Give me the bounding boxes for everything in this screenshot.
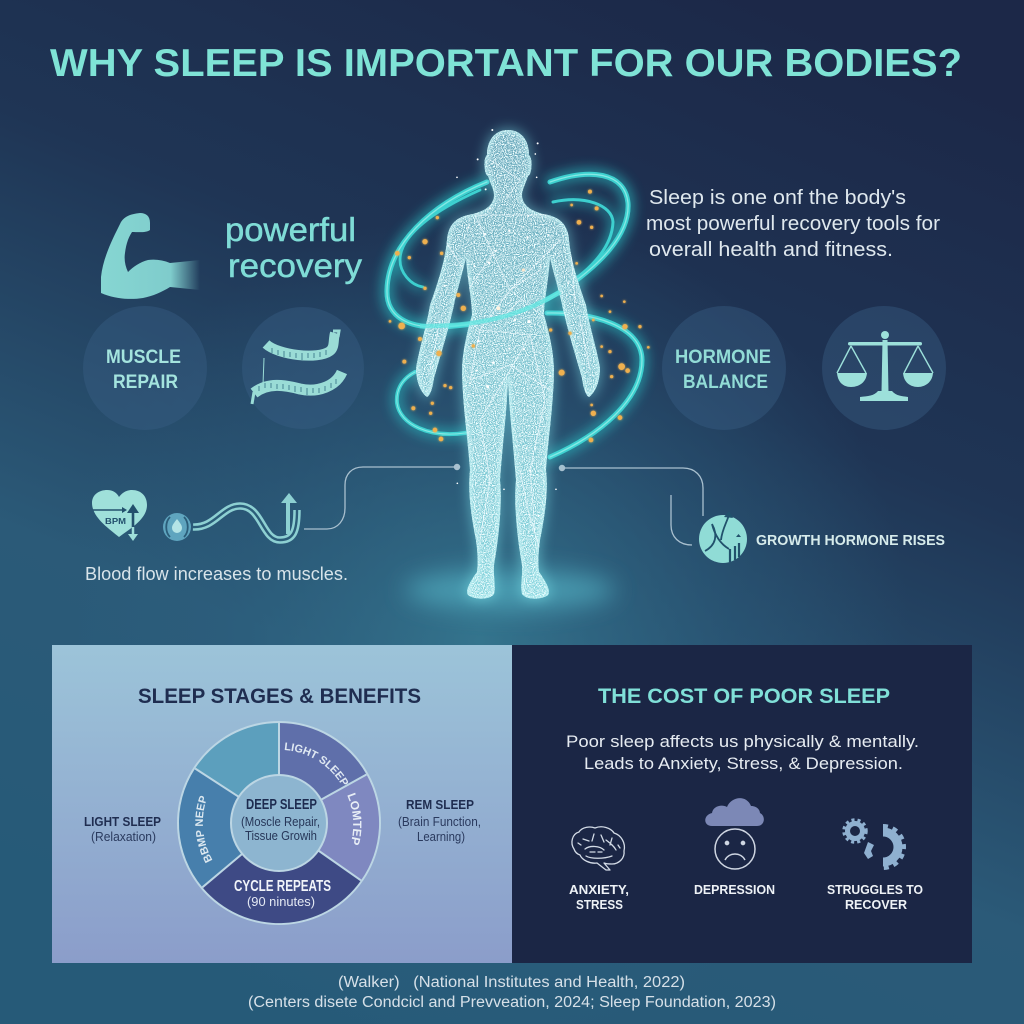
footer: references: (Walker) (National Institutes and Health, 2022) xyxy=(338,974,685,991)
label: struggles to recover: RECOVER xyxy=(845,897,908,912)
constellation lines xyxy=(430,160,590,550)
text: intro sentence: most powerful recovery tools for xyxy=(646,213,940,235)
icon: heart with BPM: BPM xyxy=(105,516,126,526)
chart: sleep cycle ring xyxy=(177,721,381,925)
badge: muscle repair: MUSCLE xyxy=(106,347,181,368)
title: WHY SLEEP IS IMPORTANT FOR OUR BODIES? xyxy=(50,42,962,85)
label: light sleep: (Relaxation) xyxy=(91,830,156,844)
text: poor sleep description: Leads to Anxiety, Stress, & Depression. xyxy=(584,754,903,773)
badge: hormone balance xyxy=(662,306,786,430)
heading: powerful recovery xyxy=(225,211,363,284)
label: struggles to recover xyxy=(827,882,923,912)
segment: lomtep: LOMTEP xyxy=(348,792,362,845)
label: light sleep: LIGHT SLEEP xyxy=(84,814,161,829)
heading: powerful recovery: recovery xyxy=(228,247,363,284)
centre: deep sleep: DEEP SLEEP xyxy=(246,797,317,813)
label: light sleep xyxy=(84,814,161,844)
swirls behind body xyxy=(387,174,642,457)
text: blood flow: Blood flow increases to muscles. xyxy=(85,564,348,584)
body glow xyxy=(416,130,600,599)
centre: deep sleep: Tissue Growih xyxy=(245,828,317,843)
centre: deep sleep: (Moscle Repair, xyxy=(241,814,320,829)
icon: growth hormone chart xyxy=(699,511,747,563)
footer: references xyxy=(248,974,776,1011)
badge: hormone balance: BALANCE xyxy=(683,372,768,393)
swirl passing in front of body xyxy=(420,292,560,326)
segment: unlabeled top left xyxy=(195,723,279,797)
text: intro sentence xyxy=(646,187,940,261)
heading: sleep stages: SLEEP STAGES & BENEFITS xyxy=(138,685,421,708)
badge: muscle repair xyxy=(83,306,207,430)
label: anxiety stress xyxy=(569,882,629,912)
icon: heart with BPM xyxy=(92,490,147,541)
segment: cycle repeats: CYCLE REPEATS xyxy=(234,878,331,895)
heading: powerful recovery: powerful xyxy=(225,211,356,248)
label: rem sleep: Learning) xyxy=(417,830,465,844)
text: intro sentence: Sleep is one onf the body's xyxy=(649,187,906,209)
panel: the cost of poor sleep xyxy=(512,645,972,963)
panel: sleep stages and benefits xyxy=(52,645,512,963)
label: anxiety stress: ANXIETY, xyxy=(569,882,629,897)
icon: blood flow wave with arrow xyxy=(163,493,297,541)
text: growth hormone rises: GROWTH HORMONE RISES xyxy=(756,533,945,549)
label: rem sleep: REM SLEEP xyxy=(406,797,474,812)
badge: measuring tape xyxy=(242,307,364,429)
icon: sad face xyxy=(715,829,755,869)
floor glow xyxy=(405,570,615,610)
body silhouette xyxy=(416,130,600,599)
label: anxiety stress: STRESS xyxy=(576,897,623,912)
segment: cycle repeats: (90 ninutes) xyxy=(247,894,315,909)
centre: deep sleep xyxy=(231,775,327,871)
footer: references: (Centers disete Condcicl and Prevveation, 2024; Sleep Foundation, 2023) xyxy=(248,994,776,1011)
connector: left xyxy=(304,464,460,529)
badge: muscle repair: REPAIR xyxy=(113,372,178,393)
segment: left stage: BBMP NEEP xyxy=(195,796,212,864)
body sparkle nodes xyxy=(444,129,569,517)
segment: lomtep xyxy=(320,774,380,880)
icon: flexed muscle arm xyxy=(101,213,200,299)
icon: broken gears xyxy=(844,820,904,868)
segment: cycle repeats xyxy=(202,850,361,923)
text: poor sleep description xyxy=(566,732,919,773)
icon: brain xyxy=(572,827,624,870)
connector: right xyxy=(559,465,703,545)
segment: light sleep: LIGHT SLEEP xyxy=(284,742,348,784)
golden particles xyxy=(389,190,650,442)
segment: light sleep xyxy=(280,723,366,798)
segment: left stage xyxy=(179,768,241,888)
text: intro sentence: overall health and fitness. xyxy=(649,239,893,261)
label: rem sleep: (Brain Function, xyxy=(398,815,481,829)
badge: hormone balance: HORMONE xyxy=(675,347,771,368)
label: depression: DEPRESSION xyxy=(694,882,775,897)
icon: rain cloud xyxy=(705,798,764,826)
badge: balance scale xyxy=(822,306,946,430)
figure: glowing human body with energy swirls xyxy=(387,125,650,610)
text: poor sleep description: Poor sleep affects us physically & mentally. xyxy=(566,732,919,751)
label: rem sleep xyxy=(398,797,481,844)
heading: cost of poor sleep: THE COST OF POOR SLEEP xyxy=(598,685,890,708)
label: struggles to recover: STRUGGLES TO xyxy=(827,882,923,897)
